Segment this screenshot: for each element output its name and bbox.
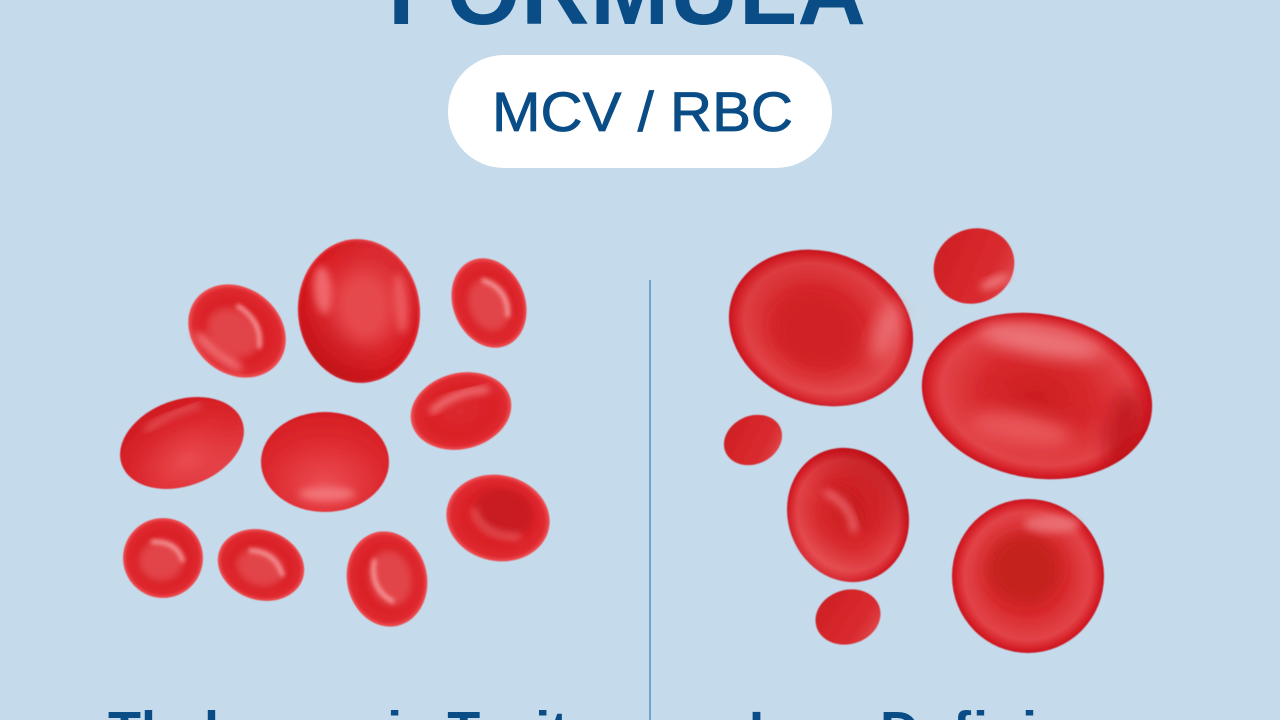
cell 10 [338,524,436,634]
cell 1 [170,265,304,397]
cell a [707,224,935,432]
cell f [952,499,1104,653]
cell 8 [123,518,203,598]
cell 7 [438,465,558,571]
cell c [921,312,1153,480]
cell 3 [438,247,540,359]
divider [649,280,651,720]
formula text: MCV / RBC [492,80,793,143]
cell 6 [402,362,520,460]
panel: thalassemia trait cells [107,234,558,634]
cell 5 [261,412,389,512]
cell 2 [292,234,426,388]
cell 9 [208,518,314,612]
cell e [768,431,928,599]
formula pill [448,55,832,168]
panel: iron deficiency cells [707,215,1165,653]
cell d [716,406,790,474]
cell b [921,215,1027,317]
cell g [808,581,888,653]
cell 4 [107,381,257,505]
